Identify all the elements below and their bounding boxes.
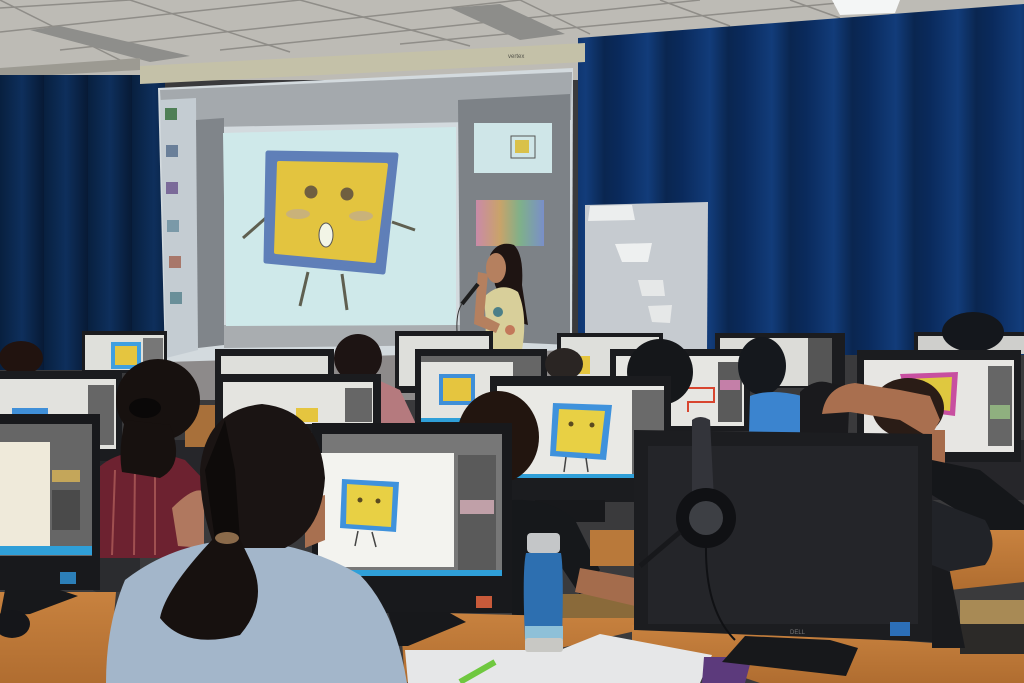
man's forearm [575,568,635,606]
projector screen housing: vertex [508,54,524,60]
person between screens [334,334,416,424]
ceiling [0,0,1024,80]
curtain: right [578,4,1024,355]
water bottle [524,533,563,652]
monitor row two B [415,349,547,427]
monitor row three A [0,371,122,461]
desks [0,530,1024,683]
desk row behind [0,440,1024,500]
person in blue shirt [738,337,940,438]
presenter [457,244,528,350]
back row monitor 3 [557,333,663,378]
front monitor centre [312,423,512,646]
projector screen housing [140,43,585,84]
headset [640,417,736,640]
back row monitor 4 [715,333,845,388]
front monitor back side with headset: DELL [790,630,806,636]
monitor row three C [490,376,671,522]
artboard [223,127,456,326]
curtain: left [0,75,165,370]
desktop icons [165,108,182,304]
person with arms raised [872,378,945,468]
monitor row three B [215,374,381,432]
character on the screen [243,153,415,310]
front monitor left [0,414,100,638]
man dark shirt [457,391,600,615]
back row monitor 2 [395,331,493,393]
person behind center [545,348,583,380]
whiteboard [585,202,708,352]
person center dark hair [627,339,693,405]
woman in red top [95,359,204,558]
back person far left [0,341,43,375]
chair behind left woman [90,552,140,592]
monitor row two A [215,349,334,377]
properties panel thumbnail [474,123,552,173]
monitor stand [722,636,858,676]
front monitor back side with headset [634,417,932,676]
wood strip behind left woman [185,405,217,447]
dark backpack on right desk [932,460,1024,648]
projection screen [158,68,573,362]
monitor row two D [857,350,1021,462]
back row monitor 1 [82,331,167,373]
woman in grey-blue shirt [106,404,407,683]
color palette [476,200,544,246]
back person far right [942,312,1004,352]
papers on desk [405,634,752,683]
wall under the screen [160,340,580,400]
monitor row two C [610,349,750,431]
back row monitor 5 [914,332,1024,354]
